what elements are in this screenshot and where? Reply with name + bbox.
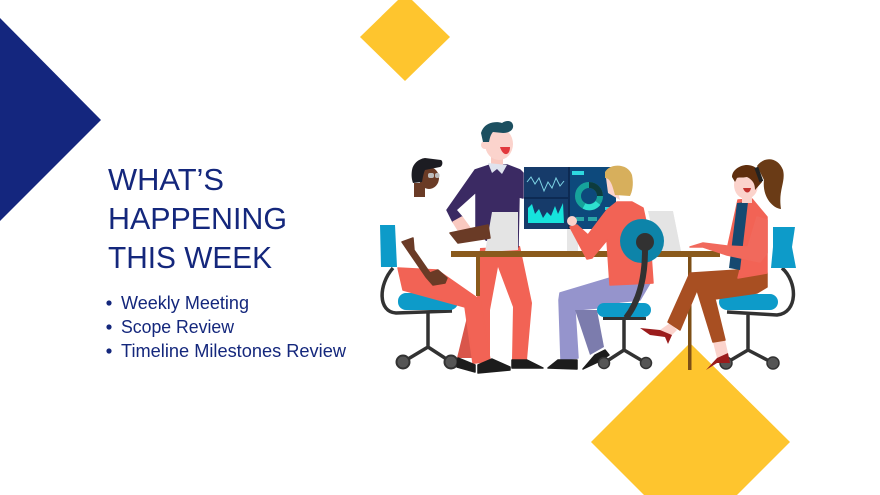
bullet list — [106, 293, 347, 361]
title: WHAT’S — [108, 162, 224, 197]
title — [108, 162, 287, 275]
center chair — [597, 219, 664, 368]
navy triangle — [0, 18, 101, 221]
desk — [451, 251, 720, 370]
top yellow diamond — [360, 0, 450, 81]
illustration: team meeting — [380, 121, 796, 373]
person: seated blond man — [548, 166, 664, 369]
bottom yellow diamond — [591, 343, 790, 495]
title: HAPPENING — [108, 201, 287, 236]
right chair — [719, 227, 796, 369]
bullet list: Scope Review — [121, 317, 235, 337]
monitor — [524, 167, 616, 251]
person: seated man with glasses — [380, 158, 510, 373]
person: seated woman — [640, 159, 796, 370]
bullet list: Timeline Milestones Review — [121, 341, 347, 361]
left chair — [380, 225, 458, 368]
bullet list: Weekly Meeting — [121, 293, 249, 313]
laptop: right — [648, 211, 681, 251]
person: standing man — [447, 121, 543, 368]
title: THIS WEEK — [108, 240, 272, 275]
